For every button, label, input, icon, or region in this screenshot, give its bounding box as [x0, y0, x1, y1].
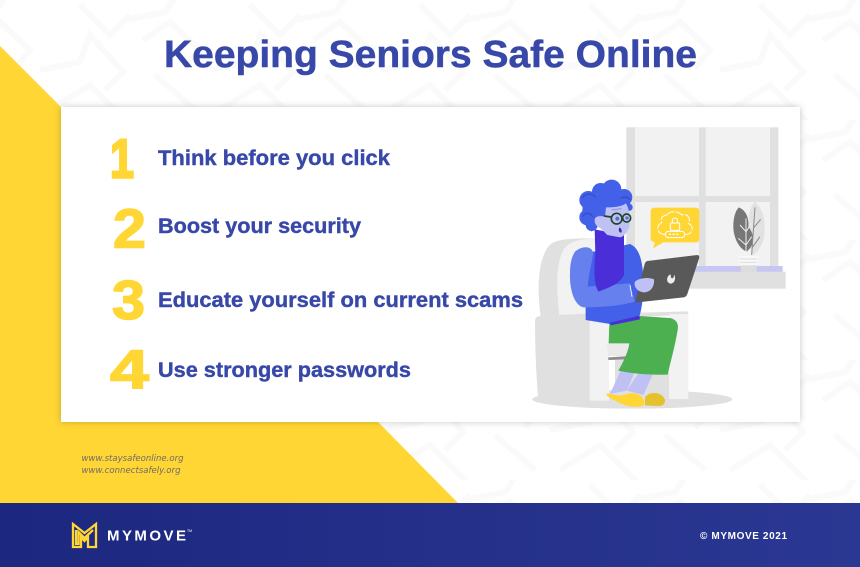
- copyright: © MYMOVE 2021: [700, 531, 787, 542]
- tip 3: Educate yourself on current scams: [158, 289, 523, 312]
- hand: [635, 278, 654, 292]
- icon: potted plant: [733, 202, 765, 272]
- logo: MyMove: [73, 524, 192, 547]
- white card panel: [61, 107, 800, 422]
- source links: www.staysafeonline.org: [82, 454, 184, 464]
- hair: [579, 180, 633, 232]
- source links: [82, 454, 184, 476]
- scarf: [594, 229, 624, 292]
- torso: [585, 244, 643, 324]
- tip 1: 1: [110, 128, 134, 190]
- tip 2: Boost your security: [158, 215, 361, 238]
- list of tips: [110, 128, 523, 400]
- title: Keeping Seniors Safe Online: [164, 34, 697, 76]
- slippers: [645, 393, 665, 406]
- tip 2: 2: [113, 198, 146, 260]
- tip 4: Use stronger passwords: [158, 359, 411, 382]
- legs: [610, 368, 635, 394]
- tip 4: [110, 338, 411, 400]
- glasses: [604, 213, 631, 224]
- illustration: senior using a tablet: [532, 127, 786, 409]
- tip 1: Think before you click: [158, 147, 390, 170]
- tip 2: [113, 198, 361, 260]
- window: [626, 127, 786, 289]
- footer band: [0, 503, 860, 567]
- tip 3: [112, 269, 523, 331]
- source links: www.connectsafely.org: [82, 466, 181, 476]
- face: [595, 203, 630, 237]
- logo: MyMove: TM: [187, 529, 192, 533]
- armchair: [532, 238, 732, 409]
- icon: password cloud speech bubble: [651, 208, 699, 248]
- tablet: [635, 255, 699, 303]
- skirt: [609, 316, 678, 375]
- arm: [570, 247, 635, 307]
- tip 3: 3: [112, 269, 145, 331]
- logo: MyMove: MYMOVE: [107, 528, 186, 544]
- yellow diagonal shape: [0, 46, 458, 503]
- tip 4: 4: [110, 338, 150, 400]
- person: [570, 180, 699, 407]
- tip 1: [110, 128, 390, 190]
